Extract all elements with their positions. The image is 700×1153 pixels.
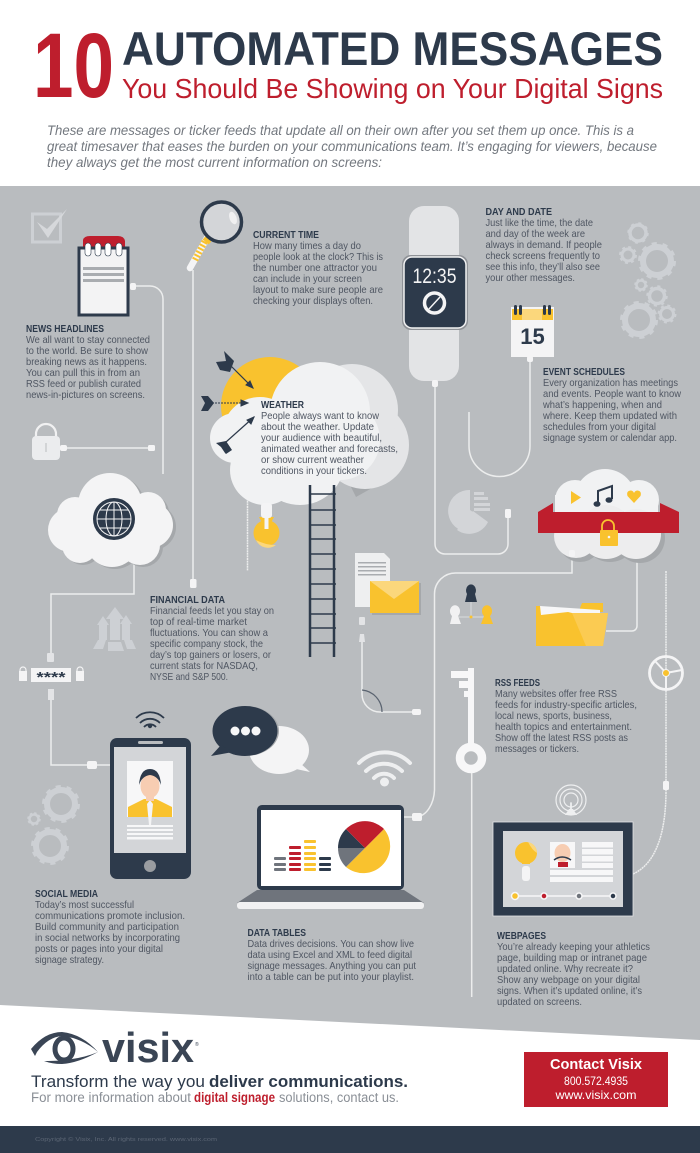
text: rss feeds: Show off the latest RSS posts as (495, 732, 628, 744)
text: event schedules (542, 366, 681, 444)
icon: lock with cable (32, 424, 155, 460)
text: weather: conditions in your tickers. (261, 465, 367, 477)
text: current time: checking your displays often. (253, 295, 373, 307)
text: current time: layout to make sure people are (253, 284, 383, 296)
icon: key (451, 668, 482, 769)
text: weather: animated weather and forecasts, (261, 443, 398, 455)
person (128, 769, 172, 825)
text: rss feeds: feeds for industry-specific articles, (495, 699, 637, 711)
plug: laptop (412, 813, 422, 821)
text: financial data: current stats for NASDAQ, (150, 660, 258, 672)
text: day and date: always in demand. If people (486, 239, 602, 251)
text: data tables: signage messages. Anything you can put (248, 960, 416, 972)
footer tagline: Transform the way you (31, 1072, 205, 1091)
title main line: AUTOMATED MESSAGES (122, 22, 663, 75)
text: data tables: DATA TABLES (248, 927, 306, 939)
icon: gears lower left (28, 787, 78, 863)
watch time: 12:35 (412, 265, 456, 288)
text: news headlines: to the world. Be sure to show (26, 345, 148, 357)
intro paragraph: great timesaver that eases the burden on your communications team. It’s engaging for viewers, because (47, 138, 657, 154)
icon: growth arrows (93, 607, 136, 651)
plug: pie chart (505, 509, 511, 518)
text: weather: People always want to know (261, 410, 379, 422)
text: news headlines: NEWS HEADLINES (26, 323, 104, 335)
connector lines (51, 270, 666, 997)
icon: calendar (511, 305, 554, 357)
text: current time: people look at the clock? This is (253, 251, 383, 263)
plug: calendar (527, 356, 533, 362)
icon: pie chart grey (448, 490, 490, 534)
text: financial data: Financial feeds let you stay on (150, 605, 274, 617)
icon: speech bubbles (211, 706, 310, 774)
text: weather (261, 399, 398, 477)
plug: notepad (130, 283, 136, 290)
text: social media: Today’s most successful (35, 899, 134, 911)
text: current time: CURRENT TIME (253, 229, 319, 241)
footer info line: solutions, contact us. (279, 1090, 399, 1105)
icon: antenna (556, 785, 586, 815)
text: data tables (248, 927, 416, 983)
text: day and date: DAY AND DATE (486, 206, 552, 218)
icon: weather cloud (210, 362, 409, 505)
text: rss feeds: Many websites offer free RSS (495, 688, 617, 700)
text: webpages: You’re already keeping your athletics (497, 941, 650, 953)
text: news headlines: RSS feed or publish curated (26, 378, 141, 390)
text: weather: about the weather. Update (261, 421, 374, 433)
intro paragraph: These are messages or ticker feeds that update all on their own after you set them up once. This is a (47, 122, 634, 138)
text: social media: communications promote inclusion. (35, 910, 185, 922)
text: day and date: check screens frequently to (486, 250, 600, 262)
text: webpages (497, 930, 650, 1008)
icon: red media cloud (538, 469, 679, 563)
lock on cloud (600, 520, 618, 546)
icon: laptop (237, 805, 424, 909)
logo wordmark: visix (102, 1024, 195, 1071)
footer info line: digital signage (194, 1090, 275, 1105)
text: news headlines: breaking news as it happens. (26, 356, 147, 368)
text: weather: or show current weather (261, 454, 364, 466)
text: event schedules: Every organization has meetings (543, 377, 678, 389)
footer info line: For more information about (31, 1090, 191, 1105)
plug: financial data (190, 579, 196, 588)
text: webpages: updated online. Why recreate it? (497, 963, 633, 975)
left padlock (19, 667, 27, 681)
text: day and date (486, 206, 602, 284)
icon: wifi dark (136, 712, 164, 728)
text: data tables: Data drives decisions. You can show live (248, 938, 414, 950)
footer tagline: deliver communications. (209, 1072, 408, 1091)
text: data tables: into a table can be put into your playlist. (248, 971, 414, 983)
text: financial data: FINANCIAL DATA (150, 594, 225, 606)
icon: ladder (309, 485, 336, 657)
text: current time: How many times a day do (253, 240, 361, 252)
music note icon (594, 486, 612, 507)
text: webpages: Show any webpage on your digital (497, 974, 640, 986)
tablet profile card (550, 842, 575, 868)
text: social media: in social networks by incorporating (35, 932, 180, 944)
contact box (524, 1052, 668, 1107)
text: day and date: your other messages. (486, 272, 575, 284)
icon: password box (19, 653, 97, 769)
plug: document cable (412, 709, 421, 715)
text: webpages: page, building map or intranet page (497, 952, 647, 964)
text: current time: can include in your screen (253, 273, 362, 285)
text: webpages: signs. When it’s updated online, it’s (497, 985, 642, 997)
heart icon (627, 490, 641, 503)
text: rss feeds: local news, sports, business, (495, 710, 612, 722)
plug: red cloud (569, 550, 575, 557)
intro paragraph (47, 122, 657, 170)
text: webpages: updated on screens. (497, 996, 582, 1008)
text: current time (253, 229, 383, 307)
calendar date: 15 (520, 324, 545, 349)
text: webpages: WEBPAGES (497, 930, 546, 942)
play icon (571, 491, 581, 504)
text: financial data: top of real-time market (150, 616, 247, 628)
text: social media (35, 888, 185, 966)
text: news headlines (26, 323, 150, 401)
footer white panel (0, 1005, 700, 1153)
eye mark (31, 1032, 98, 1064)
text: rss feeds (495, 677, 637, 755)
text: event schedules: signage system or calendar app. (543, 432, 677, 444)
text: event schedules: and events. People want to know (543, 388, 681, 400)
icon: wifi white (359, 752, 410, 786)
registered mark: ® (195, 1041, 199, 1048)
text: social media: posts or pages into your digital (35, 943, 163, 955)
text: weather: your audience with beautiful, (261, 432, 382, 444)
text: financial data: fluctuations. You can show a (150, 627, 268, 639)
bottom dark bar (0, 1126, 700, 1153)
text: event schedules: what’s happening, when and (542, 399, 662, 411)
main grey background panel (0, 186, 700, 1046)
icon: smart watch (402, 206, 468, 381)
text: rss feeds: RSS FEEDS (495, 677, 540, 689)
watch dial (424, 293, 444, 313)
tablet timeline (512, 892, 616, 900)
icon: gears upper right (620, 224, 676, 337)
right padlock (76, 667, 84, 681)
intro paragraph: they always get the most current information on screens: (47, 154, 382, 170)
text: data tables: data using Excel and XML to feed digital (248, 949, 412, 961)
contact box: www.visix.com (554, 1088, 636, 1102)
icon: globe cloud (48, 473, 176, 569)
icon: magnifying glass (190, 202, 242, 268)
icon: three arrows (201, 351, 254, 454)
icon: folder (536, 603, 608, 646)
text: financial data: day’s top gainers or losers, or (150, 649, 271, 661)
text: day and date: Just like the time, the date (486, 217, 593, 229)
text: social media: Build community and participation (35, 921, 179, 933)
text: financial data (150, 594, 274, 683)
icon: sun (221, 357, 319, 455)
icon: tablet webpage (493, 822, 633, 916)
contact box: Contact Visix (550, 1056, 643, 1073)
text: rss feeds: messages or tickers. (495, 743, 579, 755)
tablet bulb (515, 842, 537, 881)
text: social media: signage strategy. (35, 954, 104, 966)
icon: wheel (650, 656, 682, 690)
text: current time: the number one attractor you (253, 262, 377, 274)
icon: smartphone (110, 738, 191, 879)
pie chart (338, 821, 390, 873)
icon: checkbox (32, 209, 67, 242)
text: financial data: specific company stock, the (150, 638, 263, 650)
bar chart (274, 840, 331, 871)
title number 10: 10 (33, 15, 114, 117)
text: news headlines: news-in-pictures on screens. (26, 389, 145, 401)
plug: watch (432, 380, 438, 387)
text: day and date: see this info, they’ll also see (486, 261, 600, 273)
footer info line (31, 1090, 399, 1105)
icon: document and envelope (355, 553, 421, 642)
icon: light bulb (254, 503, 280, 548)
text: news headlines: We all want to stay connected (26, 334, 150, 346)
copyright line: Copyright © Visix, Inc. All rights reserved. www.visix.com (35, 1136, 217, 1143)
text: rss feeds: health topics and entertainment. (495, 721, 632, 733)
title (33, 15, 663, 117)
icon: notepad (79, 236, 128, 315)
text: news headlines: You can pull this in from an (26, 367, 140, 379)
contact box: 800.572.4935 (564, 1074, 628, 1088)
title sub line: You Should Be Showing on Your Digital Signs (122, 73, 663, 104)
plug: webpages (663, 781, 669, 790)
text: social media: SOCIAL MEDIA (35, 888, 98, 900)
text: financial data: NYSE and S&P 500. (150, 671, 228, 683)
visix logo (31, 1024, 199, 1071)
text: event schedules: EVENT SCHEDULES (543, 366, 625, 378)
footer tagline (31, 1072, 408, 1091)
globe (94, 499, 134, 539)
icon: org chart (450, 584, 493, 624)
text: weather: WEATHER (261, 399, 304, 411)
text: day and date: and day of the week are (486, 228, 585, 240)
text: event schedules: schedules from your digital (543, 421, 656, 433)
password stars: **** (36, 669, 66, 686)
text: event schedules: where. Keep them updated with (542, 410, 677, 422)
